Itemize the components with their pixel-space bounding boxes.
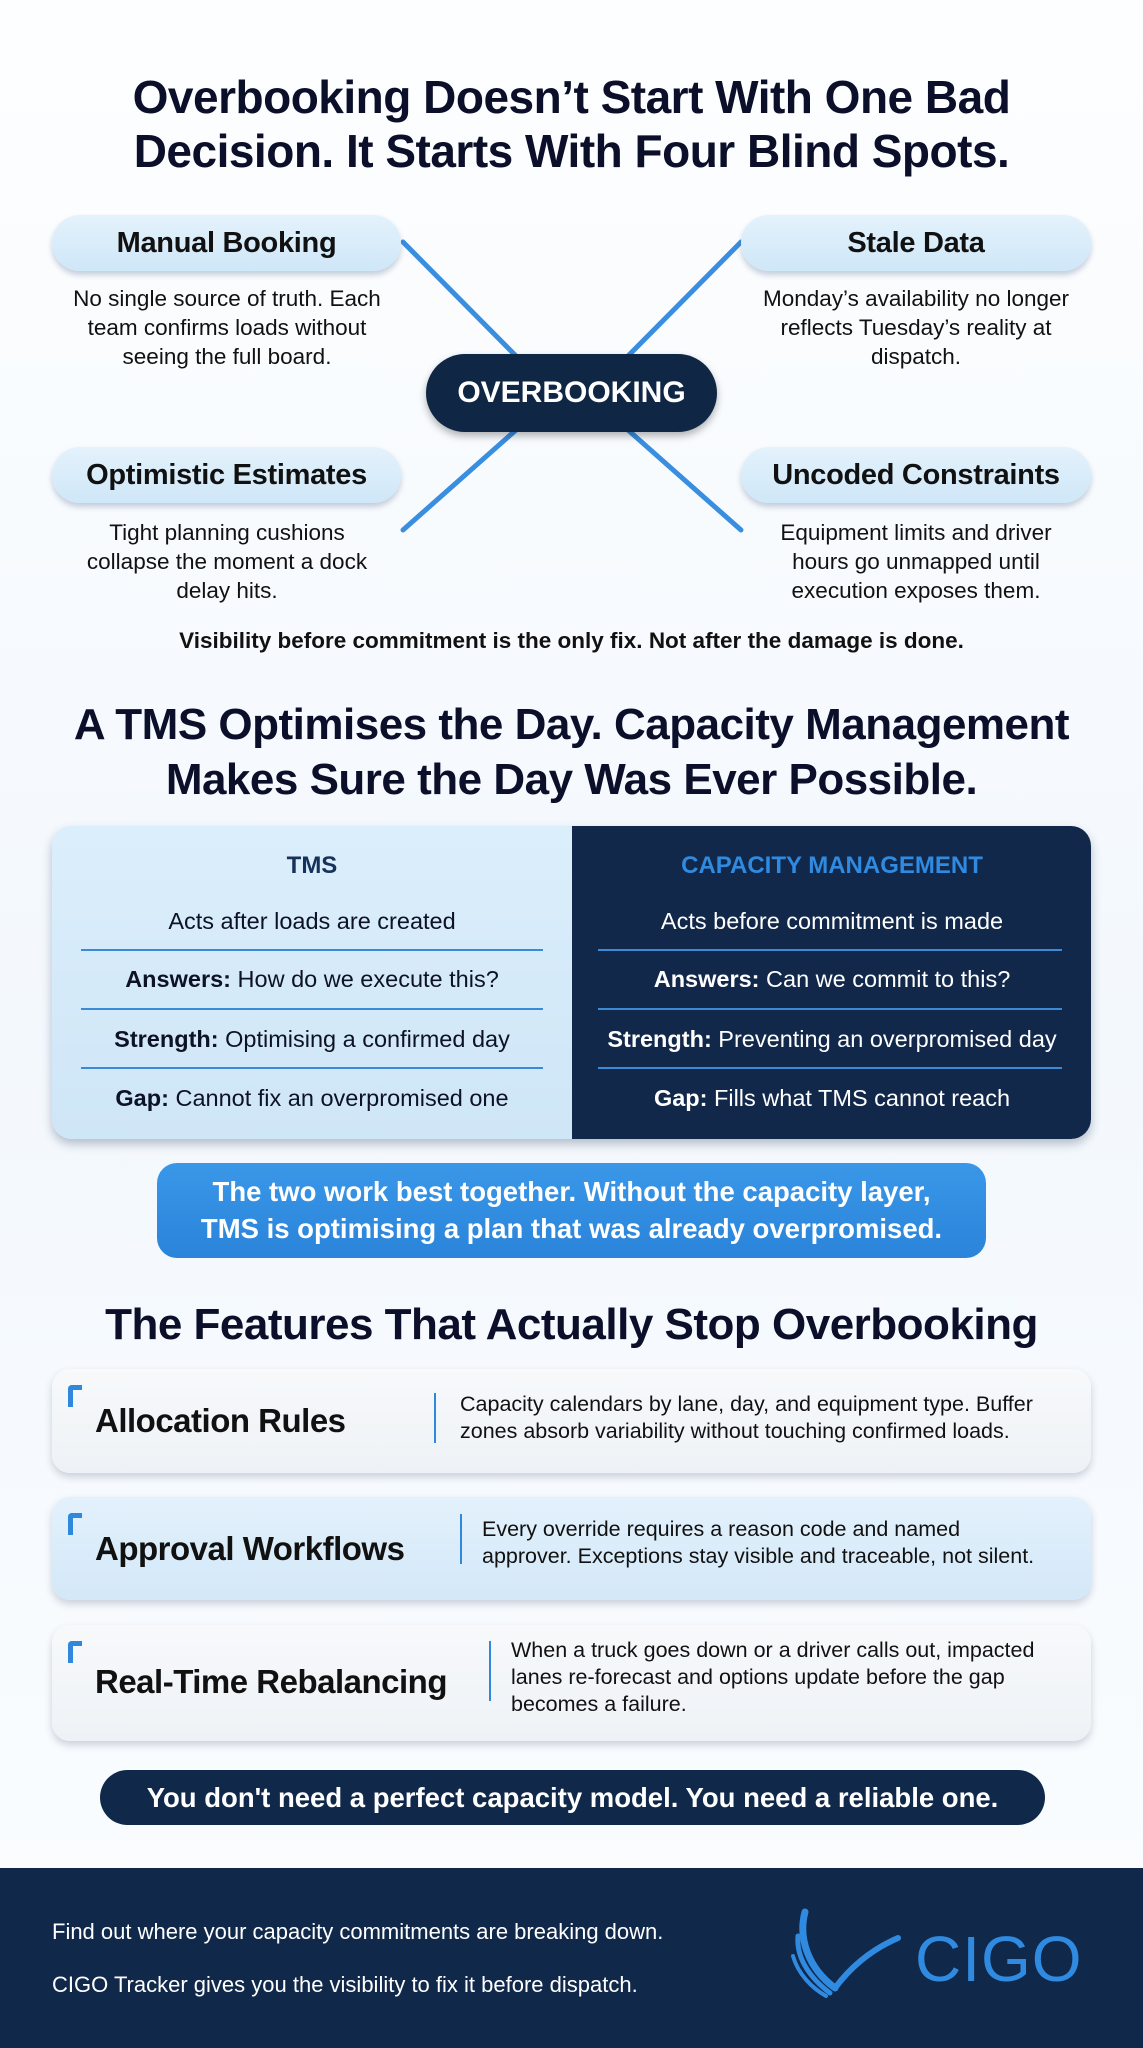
card: Approval Workflows: Approval Workflows — [95, 1530, 404, 1567]
heading 3: The Features That Actually Stop Overbooking — [105, 1300, 1038, 1349]
pill: Manual Booking: Manual Booking — [117, 226, 336, 258]
text: stale data desc: dispatch. — [871, 344, 961, 369]
center node: OVERBOOKING: OVERBOOKING — [457, 376, 686, 409]
card: Real-Time Rebalancing: When a truck goes down or a driver calls out, impacted — [511, 1638, 1034, 1662]
callout: work best together — [157, 1163, 986, 1258]
text: optimistic desc: collapse the moment a dock — [87, 549, 367, 574]
footer text — [52, 1919, 663, 1997]
card: Real-Time Rebalancing: Real-Time Rebalancing — [95, 1663, 447, 1700]
text: optimistic desc — [87, 520, 368, 603]
card: Approval Workflows: Every override requires a reason code and named — [482, 1517, 960, 1541]
pill: Optimistic Estimates: Optimistic Estimates — [86, 458, 367, 490]
banner: reliable model: You don't need a perfect capacity model. You need a reliable one. — [147, 1782, 998, 1813]
card: Real-Time Rebalancing: becomes a failure. — [511, 1692, 687, 1716]
column: Capacity Management — [572, 826, 1091, 1139]
heading 2 — [74, 700, 1069, 804]
column: Capacity Management: Gap: Fills what TMS cannot reach — [654, 1085, 1010, 1111]
panel: comparison — [52, 826, 1091, 1139]
column: TMS: Answers: How do we execute this? — [125, 966, 499, 992]
card: Allocation Rules: Capacity calendars by lane, day, and equipment type. Buffer — [460, 1392, 1033, 1416]
column: Capacity Management: Strength: Preventing an overpromised day — [607, 1026, 1057, 1052]
card: Approval Workflows: approver. Exceptions stay visible and traceable, not silent. — [482, 1544, 1034, 1568]
heading 2: A TMS Optimises the Day. Capacity Management — [74, 700, 1069, 749]
column: Capacity Management: Acts before commitment is made — [661, 908, 1003, 934]
column: TMS: Gap: Cannot fix an overpromised one — [115, 1085, 509, 1111]
text: uncoded desc — [780, 520, 1052, 603]
heading 2: Makes Sure the Day Was Ever Possible. — [166, 755, 977, 804]
title: Overbooking Doesn’t Start With One Bad — [133, 71, 1010, 123]
card: Approval Workflows — [52, 1497, 1091, 1600]
callout: work best together: The two work best together. Without the capacity layer, — [213, 1176, 930, 1207]
card: Real-Time Rebalancing — [52, 1625, 1091, 1741]
column: TMS: Acts after loads are created — [168, 908, 456, 934]
column: TMS: TMS — [287, 852, 337, 879]
text: manual booking desc — [73, 286, 381, 369]
text: optimistic desc: Tight planning cushions — [109, 520, 345, 545]
column: TMS: Strength: Optimising a confirmed day — [114, 1026, 510, 1052]
card: Allocation Rules: Allocation Rules — [95, 1402, 346, 1439]
card: Allocation Rules: zones absorb variability without touching confirmed loads. — [460, 1419, 1010, 1443]
callout: work best together: TMS is optimising a plan that was already overpromised. — [201, 1213, 942, 1244]
text: stale data desc: Monday’s availability no longer — [763, 286, 1069, 311]
column: TMS — [52, 826, 572, 1139]
text: manual booking desc: No single source of truth. Each — [73, 286, 381, 311]
pill: Manual Booking — [52, 215, 401, 271]
center node: OVERBOOKING — [426, 354, 717, 432]
text: visibility line: Visibility before commitment is the only fix. Not after the damage is done. — [179, 628, 964, 653]
banner: reliable model — [100, 1770, 1045, 1825]
text: manual booking desc: team confirms loads without — [88, 315, 366, 340]
text: stale data desc: reflects Tuesday’s reality at — [781, 315, 1051, 340]
footer text: CIGO Tracker gives you the visibility to fix it before dispatch. — [52, 1972, 638, 1997]
pill: Uncoded Constraints: Uncoded Constraints — [772, 458, 1060, 490]
logo: CIGO: CIGO — [915, 1923, 1083, 1995]
text: uncoded desc: hours go unmapped until — [792, 549, 1040, 574]
column: Capacity Management: CAPACITY MANAGEMENT — [681, 852, 983, 879]
card: Allocation Rules — [52, 1369, 1091, 1473]
footer text: Find out where your capacity commitments are breaking down. — [52, 1919, 663, 1944]
title — [133, 71, 1010, 177]
column: Capacity Management: Answers: Can we commit to this? — [654, 966, 1010, 992]
text: manual booking desc: seeing the full board. — [123, 344, 331, 369]
text: stale data desc — [763, 286, 1069, 369]
text: uncoded desc: execution exposes them. — [792, 578, 1040, 603]
text: uncoded desc: Equipment limits and driver — [780, 520, 1052, 545]
pill: Stale Data: Stale Data — [847, 226, 985, 258]
text: optimistic desc: delay hits. — [176, 578, 278, 603]
pill: Stale Data — [741, 215, 1091, 271]
title: Decision. It Starts With Four Blind Spots. — [134, 125, 1009, 177]
pill: Optimistic Estimates — [52, 447, 401, 503]
footer — [0, 1868, 1143, 2048]
card: Real-Time Rebalancing: lanes re-forecast and options update before the gap — [511, 1665, 1005, 1689]
connector lines — [400, 240, 744, 532]
pill: Uncoded Constraints — [741, 447, 1091, 503]
logo: CIGO — [791, 1908, 1083, 1998]
